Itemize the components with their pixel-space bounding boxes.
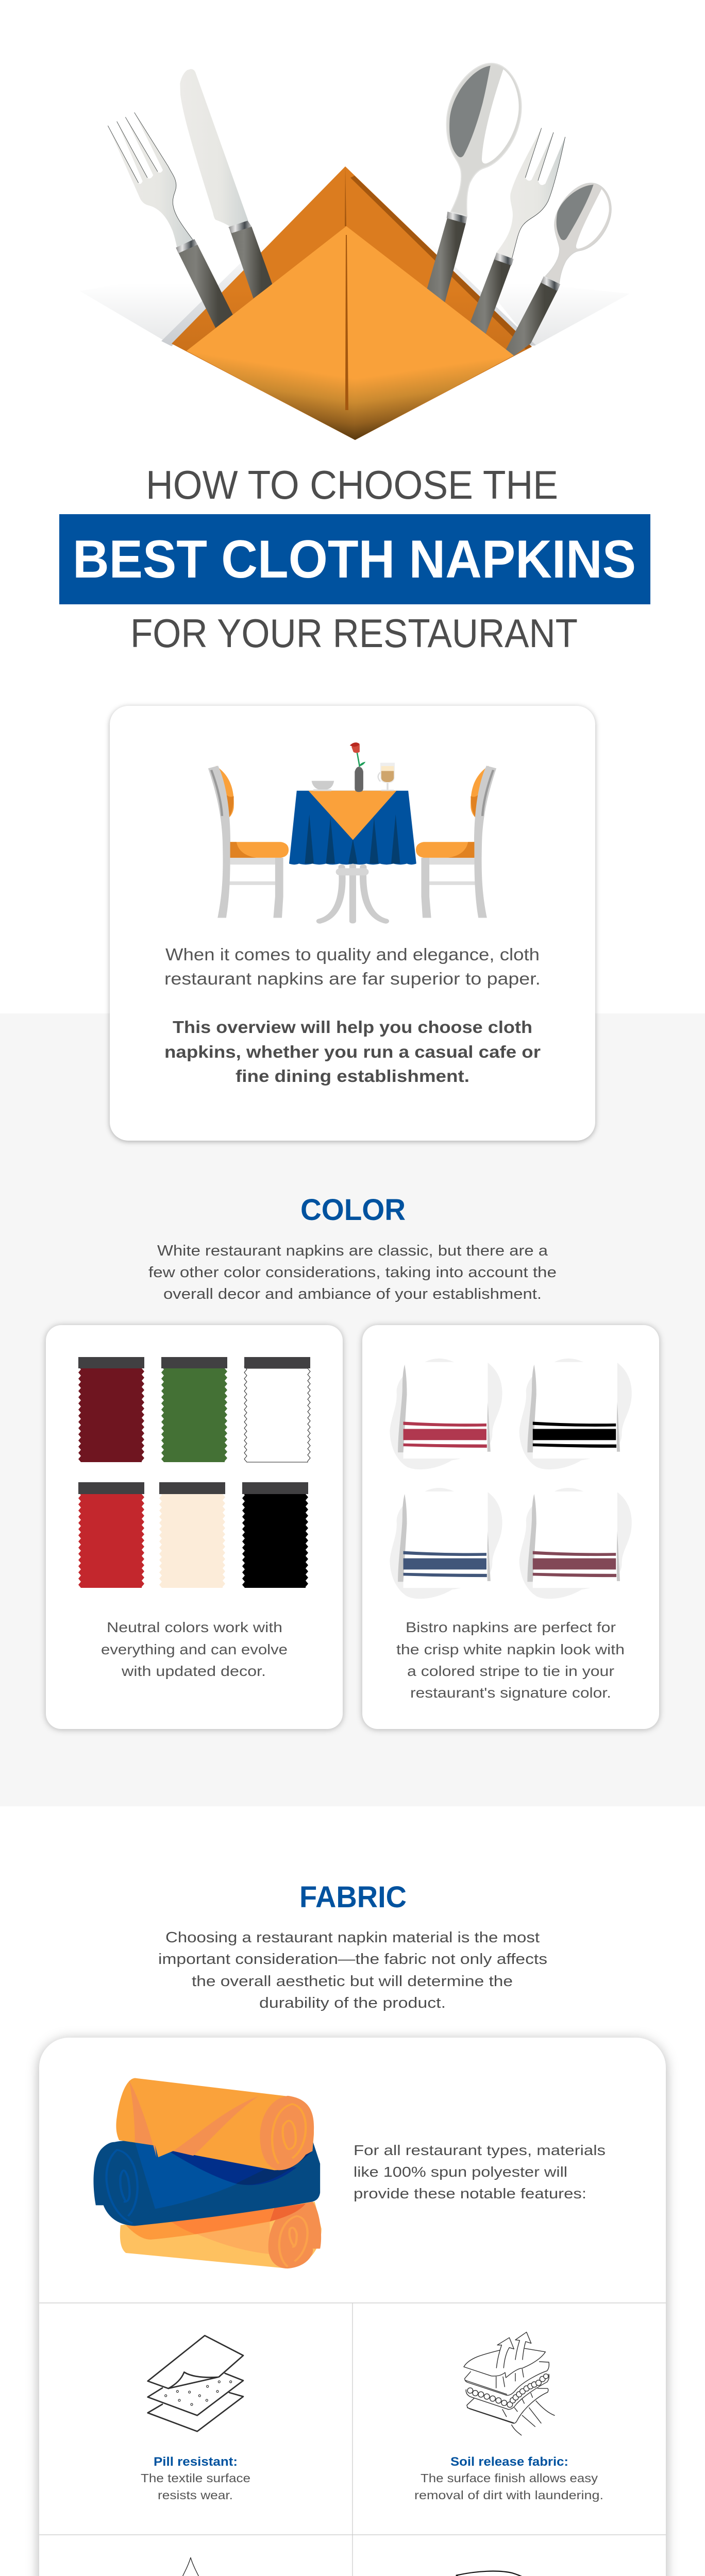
heading: color: COLOR (300, 1193, 406, 1227)
icon: pill resistant layers (148, 2335, 243, 2431)
feature text (141, 2455, 250, 2502)
fabric side text: provide these notable features: (354, 2185, 586, 2201)
back napkin fold (172, 166, 532, 440)
feature text (414, 2455, 603, 2502)
feature: absorbent (109, 2557, 282, 2576)
icon: rolled napkins (93, 2078, 322, 2268)
fabric intro text (158, 1929, 547, 2011)
panel: intro card (110, 706, 595, 1141)
swatch: green (161, 1357, 227, 1462)
panel: bistro napkins card (362, 1325, 659, 1729)
fabric side text: For all restaurant types, materials (354, 2142, 606, 2158)
neutral colors caption: Neutral colors work with (107, 1619, 282, 1635)
title line 2: BEST CLOTH NAPKINS (73, 530, 636, 589)
intro paragraph: This overview will help you choose cloth (173, 1018, 532, 1037)
feature text: resists wear. (158, 2488, 233, 2502)
hero illustration: napkin with cutlery (80, 63, 630, 440)
icon: restaurant table with two chairs (208, 742, 496, 923)
color intro text: White restaurant napkins are classic, but there are a (157, 1243, 548, 1259)
feature text: removal of dirt with laundering. (414, 2488, 603, 2502)
feature: soil release fabric (414, 2332, 603, 2502)
fabric intro text: durability of the product. (259, 1995, 446, 2011)
front napkin fold (187, 226, 514, 440)
swatch: red (78, 1482, 144, 1588)
swatch: burgundy (78, 1357, 144, 1462)
fabric intro text: the overall aesthetic but will determine the (192, 1973, 513, 1990)
panel: fabric card (39, 2038, 666, 2576)
title banner (59, 514, 650, 604)
feature: pill resistant (141, 2335, 250, 2502)
color intro text (148, 1243, 557, 1302)
grey section background (0, 1013, 705, 1806)
bistro caption: the crisp white napkin look with (396, 1641, 625, 1657)
swatch: cream (159, 1482, 225, 1588)
cutlery: knife (180, 69, 272, 298)
feature text: The surface finish allows easy (421, 2471, 598, 2485)
intro paragraph: fine dining establishment. (236, 1066, 469, 1086)
bottom roll (120, 2201, 322, 2268)
fabric side text (354, 2142, 606, 2201)
feature text: Soil release fabric: (450, 2455, 568, 2469)
fabric side text: like 100% spun polyester will (354, 2164, 567, 2180)
bistro napkins with colored stripes (390, 1359, 632, 1599)
icon: soil release layers (464, 2332, 555, 2435)
intro paragraph (164, 945, 541, 1086)
bistro caption: restaurant's signature color. (410, 1685, 611, 1701)
panel: neutral colors card (46, 1325, 343, 1729)
color intro text: few other color considerations, taking into account the (148, 1264, 557, 1281)
feature text: Pill resistant: (154, 2455, 238, 2469)
color intro text: overall decor and ambiance of your establishment. (163, 1286, 542, 1302)
heading: fabric: FABRIC (299, 1880, 407, 1914)
bistro caption (396, 1619, 625, 1701)
swatch: white (244, 1357, 310, 1462)
neutral colors caption (101, 1619, 288, 1679)
neutral colors caption: with updated decor. (121, 1663, 266, 1679)
intro paragraph: restaurant napkins are far superior to paper. (164, 969, 541, 988)
intro paragraph: napkins, whether you run a casual cafe or (164, 1042, 541, 1061)
icon: strong fabric sheets (449, 2571, 570, 2576)
title (59, 462, 650, 656)
cutlery: dessert fork (471, 128, 565, 334)
top roll (116, 2078, 314, 2170)
cutlery: salad fork (108, 112, 233, 328)
title line 1: HOW TO CHOOSE THE (146, 462, 558, 507)
neutral colors caption: everything and can evolve (101, 1641, 288, 1657)
cutlery: large spoon (427, 63, 522, 302)
fabric intro text: Choosing a restaurant napkin material is the most (165, 1929, 540, 1946)
icon: absorbent layers with water drop (142, 2557, 249, 2576)
middle blue roll (93, 2140, 320, 2226)
title line 3: FOR YOUR RESTAURANT (130, 611, 578, 656)
bistro caption: a colored stripe to tie in your (407, 1663, 614, 1679)
intro paragraph: When it comes to quality and elegance, cloth (165, 945, 540, 964)
cutlery: small spoon (506, 183, 611, 356)
fabric intro text: important consideration—the fabric not only affects (158, 1951, 547, 1968)
bistro caption: Bistro napkins are perfect for (406, 1619, 616, 1635)
feature text: The textile surface (141, 2471, 250, 2485)
swatch: black (242, 1482, 308, 1588)
feature: strong (449, 2571, 570, 2576)
